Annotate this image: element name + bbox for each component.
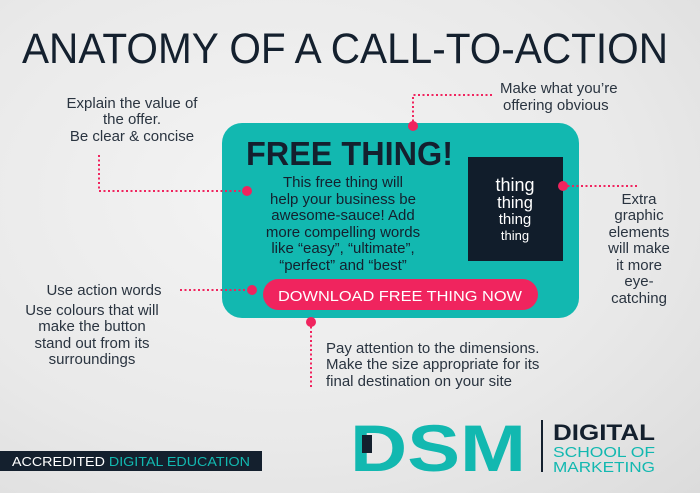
logo: DSM: SCHOOL OF — [553, 444, 655, 461]
graphic box: thing — [495, 175, 535, 195]
card body text: help your business be — [270, 191, 416, 208]
callout: action words: Use action words — [46, 282, 162, 299]
button — [263, 279, 538, 310]
callout: extra graphic elements: will make — [607, 240, 670, 257]
card body text: This free thing will — [283, 174, 403, 191]
graphic box: thing — [497, 194, 533, 212]
callout: extra graphic elements: graphic — [614, 207, 664, 224]
card body text: “perfect” and “best” — [279, 257, 407, 274]
callout: action words: Use colours that will — [25, 302, 159, 319]
callout: action words: stand out from its — [34, 335, 150, 352]
graphic box: thing — [499, 211, 531, 228]
callout: make offer obvious: Make what you’re — [500, 80, 618, 97]
title: ANATOMY OF A CALL-TO-ACTION — [22, 25, 668, 73]
callout: make offer obvious: offering obvious — [503, 97, 609, 114]
callout: extra graphic elements: catching — [611, 290, 667, 307]
callout: action words — [25, 282, 257, 368]
graphic box — [468, 157, 563, 261]
callout: make offer obvious — [408, 80, 618, 131]
graphic box: thing — [501, 228, 529, 243]
callout: action words: make the button — [38, 318, 146, 335]
accredited banner — [0, 451, 262, 471]
callout: dimensions: final destination on your site — [326, 373, 512, 390]
callout: explain value — [67, 95, 252, 196]
logo: DSM: DIGITAL — [553, 420, 655, 445]
callout: extra graphic elements: eye- — [624, 273, 654, 290]
callout: extra graphic elements — [558, 181, 670, 307]
card heading: FREE THING! — [246, 135, 453, 172]
callout: explain value: the offer. — [103, 111, 161, 128]
callout: explain value: Explain the value of — [67, 95, 198, 112]
card body text: like “easy”, “ultimate”, — [271, 240, 415, 257]
accredited banner: ACCREDITED DIGITAL EDUCATION — [12, 454, 250, 469]
callout: extra graphic elements: elements — [609, 224, 669, 241]
logo: DSM: MARKETING — [553, 459, 655, 476]
callout: extra graphic elements: Extra — [621, 191, 657, 208]
callout: explain value: Be clear & concise — [70, 128, 194, 145]
logo: DSM: DSM — [350, 411, 526, 485]
panel: call-to-action card — [222, 123, 579, 318]
logo: DSM — [350, 411, 655, 485]
card body text — [266, 174, 420, 274]
callout: dimensions — [306, 317, 539, 390]
callout: extra graphic elements: it more — [616, 257, 662, 274]
callout: dimensions: Make the size appropriate for its — [326, 356, 539, 373]
callout: action words: surroundings — [49, 351, 135, 368]
callout: dimensions: Pay attention to the dimensions. — [326, 340, 539, 357]
button: DOWNLOAD FREE THING NOW — [278, 288, 523, 305]
card body text: more compelling words — [266, 224, 420, 241]
card body text: awesome-sauce! Add — [271, 207, 415, 224]
